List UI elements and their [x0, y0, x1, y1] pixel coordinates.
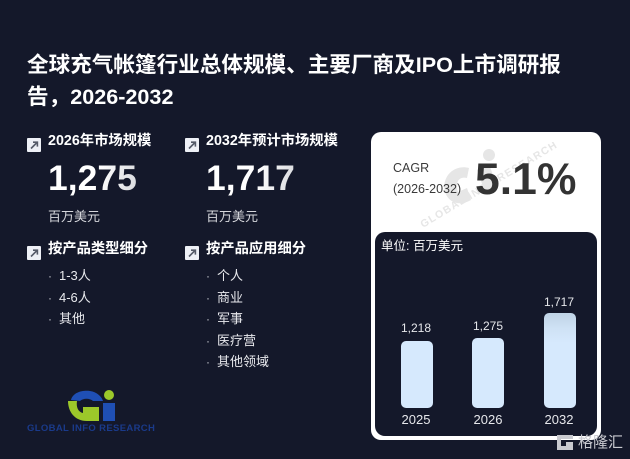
- list: product types: 4-6人: [59, 290, 91, 305]
- unit: 2026: 百万美元: [48, 209, 100, 224]
- logo: Global Info Research: [27, 390, 155, 434]
- bar 2025: [401, 341, 433, 408]
- brand text: 格隆汇: [578, 434, 623, 451]
- list: product types: ·: [48, 269, 52, 283]
- bar group: 2026: [472, 319, 504, 427]
- title: 全球充气帐篷行业总体规模、主要厂商及IPO上市调研报告，2026-2032: [27, 52, 561, 109]
- icon: arrow 2032: [185, 138, 199, 152]
- value: 1,717: 1,717: [206, 158, 295, 198]
- CAGR label: CAGR: [393, 161, 429, 175]
- icon: arrow type: [27, 246, 41, 260]
- bar 2026: [472, 338, 504, 408]
- value: 1,275: 1,275: [48, 158, 137, 198]
- CAGR label: [393, 161, 461, 196]
- list: product types: 其他: [59, 311, 85, 326]
- bar 2032: [544, 313, 576, 408]
- list: product types: [48, 268, 91, 326]
- heading: 2026 market size: 2026年市场规模: [48, 133, 151, 149]
- icon: arrow 2026: [27, 138, 41, 152]
- bar group: 2025: [401, 321, 433, 427]
- heading: by product type: 按产品类型细分: [48, 241, 148, 257]
- bar group: 2032: [544, 295, 576, 427]
- list: applications: ·: [206, 355, 210, 369]
- list: applications: 其他领域: [217, 354, 269, 369]
- panel: CAGR and chart card: [371, 132, 601, 440]
- value 1,275: 1,275: [473, 319, 503, 333]
- year 2026: 2026: [474, 412, 502, 427]
- panel: by application: [185, 240, 306, 369]
- list: applications: 军事: [217, 311, 243, 326]
- panel: 2026 market size: [27, 132, 151, 224]
- heading: by application: 按产品应用细分: [206, 241, 306, 257]
- list: applications: ·: [206, 269, 210, 283]
- chart unit label: 单位: 百万美元: [381, 239, 463, 253]
- brand mark: Gelonghui: [557, 434, 623, 451]
- logo text: GLOBAL INFO RESEARCH: [27, 423, 155, 434]
- CAGR label: (2026-2032): [393, 182, 461, 196]
- list: product types: 1-3人: [59, 268, 91, 283]
- heading: 2032 forecast market size: 2032年预计市场规模: [206, 133, 338, 149]
- list: applications: ·: [206, 291, 210, 305]
- list: product types: ·: [48, 312, 52, 326]
- panel: bar chart: [375, 232, 597, 436]
- panel: by product type: [27, 240, 148, 326]
- list: applications: 个人: [217, 268, 243, 283]
- list: applications: 商业: [217, 290, 243, 305]
- value 1,218: 1,218: [401, 321, 431, 335]
- list: applications: 医疗营: [217, 333, 256, 348]
- list: applications: [206, 268, 269, 369]
- list: applications: ·: [206, 334, 210, 348]
- year 2032: 2032: [545, 412, 573, 427]
- icon: arrow application: [185, 246, 199, 260]
- value 1,717: 1,717: [544, 295, 574, 309]
- list: product types: ·: [48, 291, 52, 305]
- panel: 2032 forecast market size: [185, 132, 338, 224]
- year 2025: 2025: [402, 412, 430, 427]
- list: applications: ·: [206, 312, 210, 326]
- CAGR value: 5.1%: [475, 155, 576, 204]
- unit: 2032: 百万美元: [206, 209, 258, 224]
- icon: brand: [557, 435, 573, 450]
